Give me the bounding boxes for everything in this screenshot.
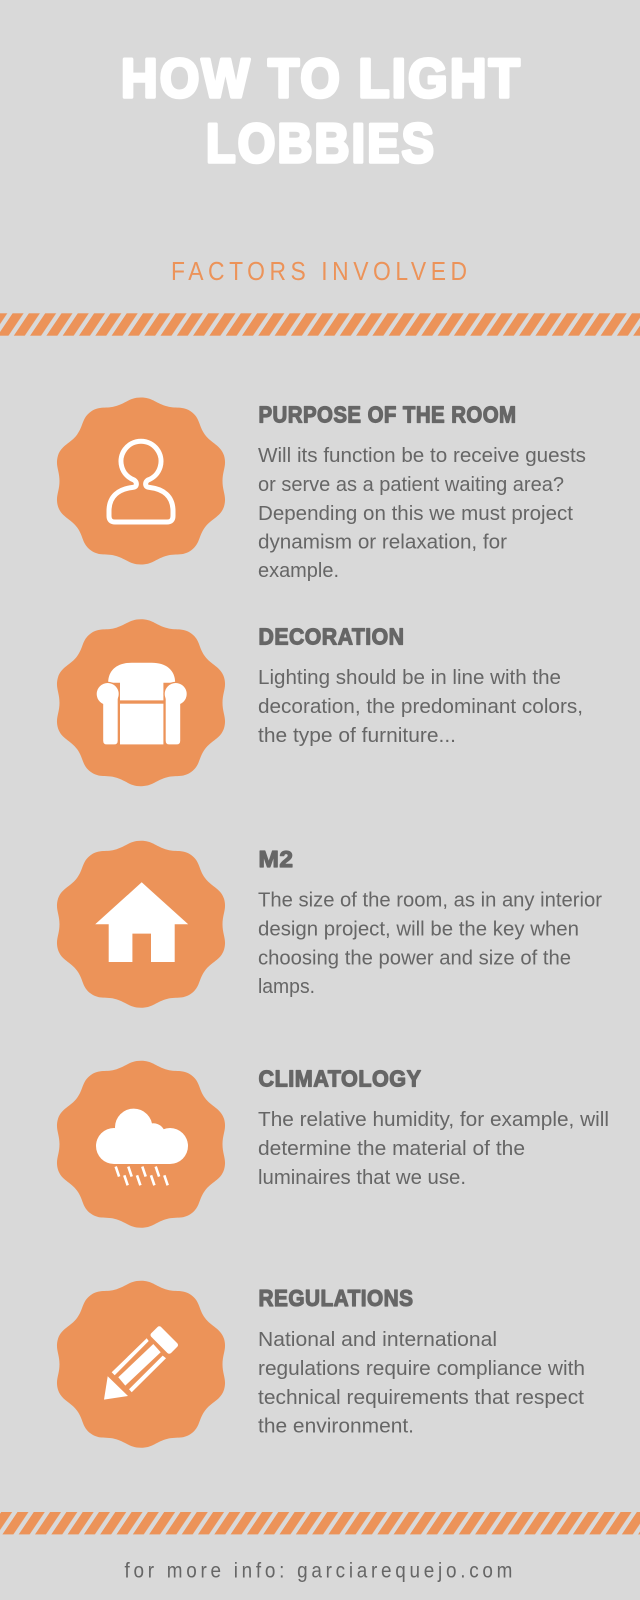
text: climatology description — [258, 1108, 609, 1189]
text: purpose description: example. — [258, 559, 339, 582]
text: decoration description: decoration, the predominant colors, — [258, 695, 583, 718]
title — [121, 47, 522, 174]
text: m2 description: design project, will be the key when — [258, 918, 579, 940]
text: m2 description: The size of the room, as in any interior — [258, 888, 602, 912]
text: decoration description: Lighting should be in line with the — [258, 666, 561, 689]
text: m2 description: choosing the power and size of the — [258, 946, 571, 970]
text: regulations description: the environment. — [258, 1414, 414, 1438]
text: purpose description: dynamism or relaxation, for — [258, 530, 507, 554]
text: regulations description: technical requirements that respect — [258, 1386, 584, 1409]
footer: more info: for more info: garciarequejo.com — [124, 1560, 512, 1583]
text: m2 description: lamps. — [258, 975, 315, 998]
icon: pencil badge — [57, 1281, 225, 1448]
panel: m2 — [57, 841, 602, 1008]
icon: house badge — [57, 841, 225, 1008]
title: HOW TO LIGHT — [121, 47, 522, 109]
panel: regulations — [57, 1281, 585, 1448]
text: purpose description: Depending on this we must project — [258, 502, 573, 525]
title: LOBBIES — [206, 112, 436, 174]
subtitle: factors involved: FACTORS INVOLVED — [171, 258, 467, 286]
text: regulations description: National and international — [258, 1328, 497, 1351]
striped divider bottom — [0, 1512, 640, 1534]
striped divider top — [0, 313, 640, 336]
text: m2 description — [258, 888, 602, 998]
icon: rain cloud badge — [57, 1061, 225, 1228]
heading: purpose of the room: PURPOSE OF THE ROOM — [258, 402, 516, 428]
panel: purpose of the room — [57, 398, 586, 582]
heading: m2: M2 — [258, 846, 294, 872]
heading: decoration: DECORATION — [258, 624, 404, 650]
text: climatology description: The relative humidity, for example, will — [258, 1108, 609, 1131]
icon: armchair badge — [57, 619, 225, 786]
text: climatology description: luminaires that we use. — [258, 1166, 466, 1189]
text: regulations description — [258, 1328, 585, 1438]
panel: climatology — [57, 1061, 609, 1228]
text: decoration description — [258, 666, 583, 747]
heading: climatology: CLIMATOLOGY — [258, 1066, 422, 1092]
heading: regulations: REGULATIONS — [258, 1285, 414, 1311]
text: purpose description: Will its function be to receive guests — [258, 444, 586, 467]
text: climatology description: determine the material of the — [258, 1137, 525, 1160]
text: decoration description: the type of furniture... — [258, 724, 456, 747]
panel: decoration — [57, 619, 583, 786]
text: purpose description — [258, 444, 586, 582]
text: regulations description: regulations require compliance with — [258, 1357, 585, 1380]
icon: person badge — [57, 398, 225, 564]
text: purpose description: or serve as a patient waiting area? — [258, 473, 564, 496]
